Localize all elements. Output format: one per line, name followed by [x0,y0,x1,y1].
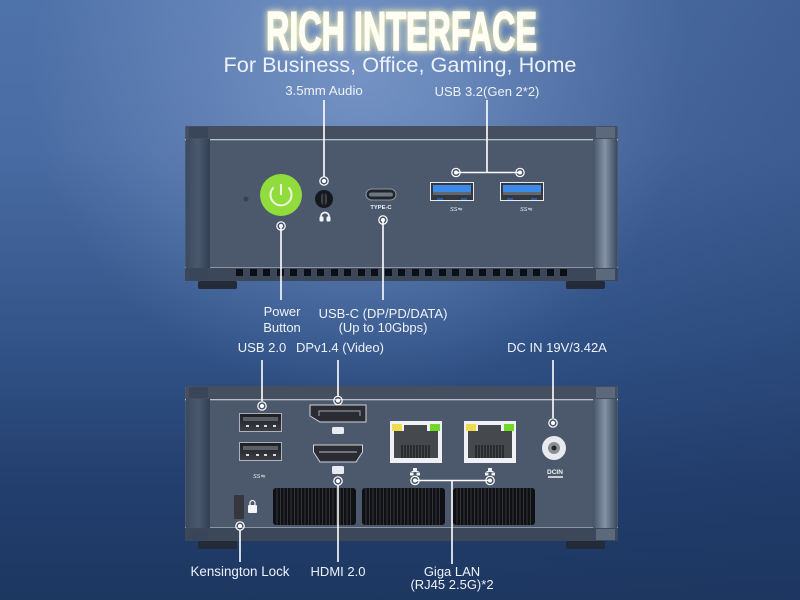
USB 3.2 port 2 [500,182,544,213]
USB 2.0 port 2 [240,442,282,480]
label: USB-C: (Up to 10Gbps) [339,320,427,335]
HDMI port [314,445,362,474]
title [266,0,537,62]
connector dots [236,168,557,530]
title: RICH INTERFACE [266,0,537,62]
vent slots [236,269,567,276]
label: Power Button: Button [263,320,301,335]
USB 3.2 port 1 [430,182,474,213]
device: front panel [185,126,618,289]
USB-C port: TYPE-C [370,205,392,211]
LAN port 1 [390,421,442,476]
indicator LED [244,196,248,202]
USB 3.2 port 1: SS⇋ [450,207,462,213]
connector lines [240,100,553,564]
vent grille 3 [453,488,535,525]
title: RICH INTERFACE [266,0,537,62]
Kensington slot and lock [234,495,257,519]
label: 3.5mm Audio: 3.5mm Audio [285,83,363,98]
USB 3.2 port 2: SS⇋ [520,207,532,213]
vent grille 1 [273,488,356,525]
label: USB 3.2: USB 3.2(Gen 2*2) [435,84,539,99]
vent grille 2 [362,488,445,525]
label: HDMI 2.0: HDMI 2.0 [311,564,365,579]
label: Giga LAN: (RJ45 2.5G)*2 [410,577,494,592]
DisplayPort [310,405,366,434]
label: Giga LAN: Giga LAN [424,564,480,579]
USB 2.0 port 1 [240,414,282,432]
audio jack [315,190,333,222]
USB-C port [366,189,396,211]
LAN port 2 [464,421,516,476]
DC power jack [542,436,566,478]
subtitle: For Business, Office, Gaming, Home [224,54,576,77]
USB 2.0 port 2: SS⇋ [253,474,265,480]
label: USB-C: USB-C (DP/PD/DATA) [319,306,447,321]
label: DC IN: DC IN 19V/3.42A [507,340,607,355]
device: rear panel [185,386,618,549]
label: Kensington Lock: Kensington Lock [190,564,290,579]
DC power jack: DCIN [547,469,563,476]
label: Power Button: Power [264,304,301,319]
label: USB 2.0: USB 2.0 [238,340,286,355]
label: DPv1.4: DPv1.4 (Video) [296,340,384,355]
icon: power button [260,174,302,216]
